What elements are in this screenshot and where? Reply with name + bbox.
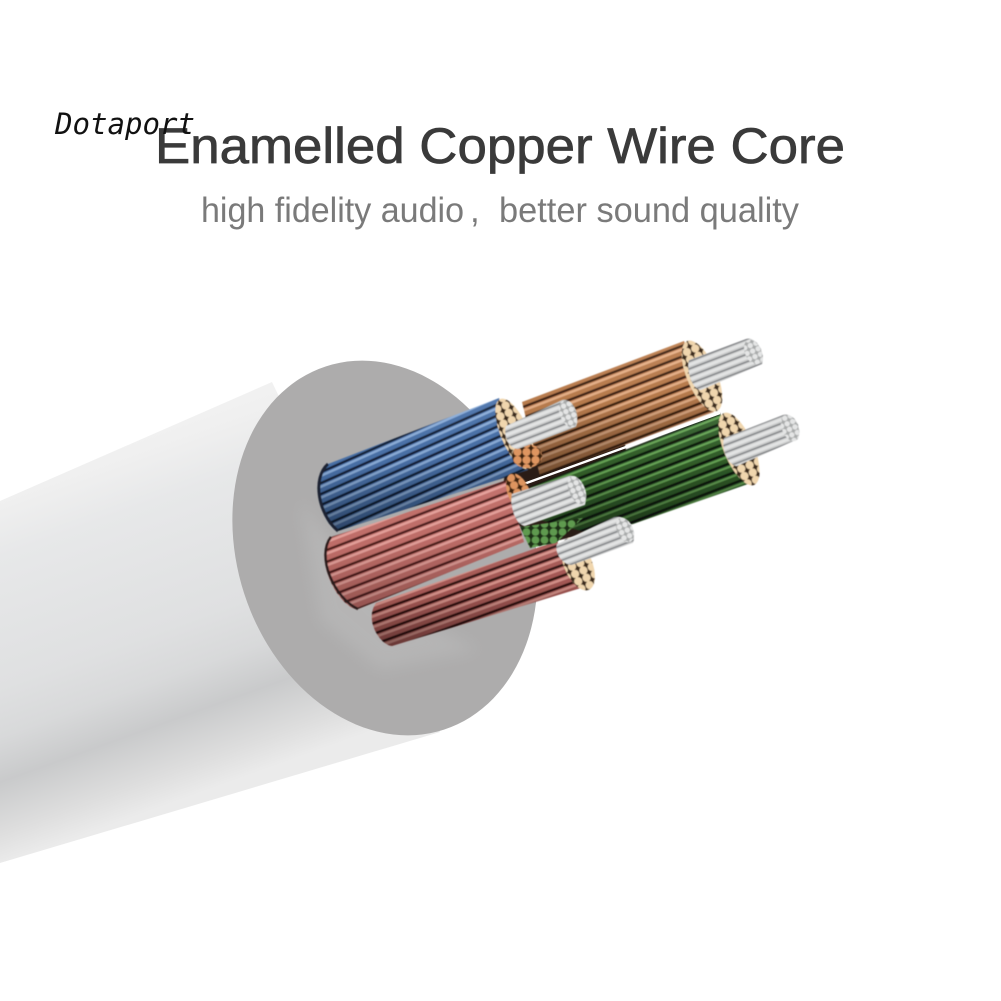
subtitle: high fidelity audio bbox=[201, 191, 464, 230]
cable end face bbox=[185, 321, 585, 775]
cable body bbox=[0, 382, 440, 863]
subtitle bbox=[201, 191, 799, 230]
dark gap between wires bbox=[500, 420, 640, 540]
subtitle: better sound quality bbox=[499, 191, 799, 230]
wire: pink bbox=[325, 469, 590, 609]
blue wire end bbox=[487, 394, 543, 474]
blue wire rim bbox=[319, 464, 338, 531]
green end cluster below pink core bbox=[520, 518, 583, 548]
wire: green bbox=[530, 407, 803, 532]
blue wire silver core bbox=[505, 398, 581, 449]
orange end cluster below blue core bbox=[512, 444, 542, 468]
wire: dark red lower bbox=[372, 515, 637, 646]
wire glow on face bbox=[300, 500, 480, 670]
watermark: Dotaport bbox=[54, 107, 195, 141]
subtitle: , bbox=[470, 191, 480, 230]
green wire end bbox=[710, 407, 768, 491]
orange wire end bbox=[673, 335, 731, 417]
red wire silver core bbox=[556, 515, 637, 565]
wire: orange copper bbox=[522, 335, 765, 476]
title: Enamelled Copper Wire Core bbox=[155, 118, 845, 174]
wire: blue bbox=[319, 394, 581, 531]
orange wire silver core bbox=[688, 337, 765, 390]
cable illustration bbox=[0, 321, 803, 863]
highlight between wires bbox=[510, 413, 720, 489]
pink wire rim bbox=[326, 537, 358, 609]
pink wire end bbox=[501, 469, 537, 517]
red wire end bbox=[554, 533, 602, 595]
pink wire silver core bbox=[511, 473, 590, 526]
green wire silver core bbox=[723, 412, 803, 466]
